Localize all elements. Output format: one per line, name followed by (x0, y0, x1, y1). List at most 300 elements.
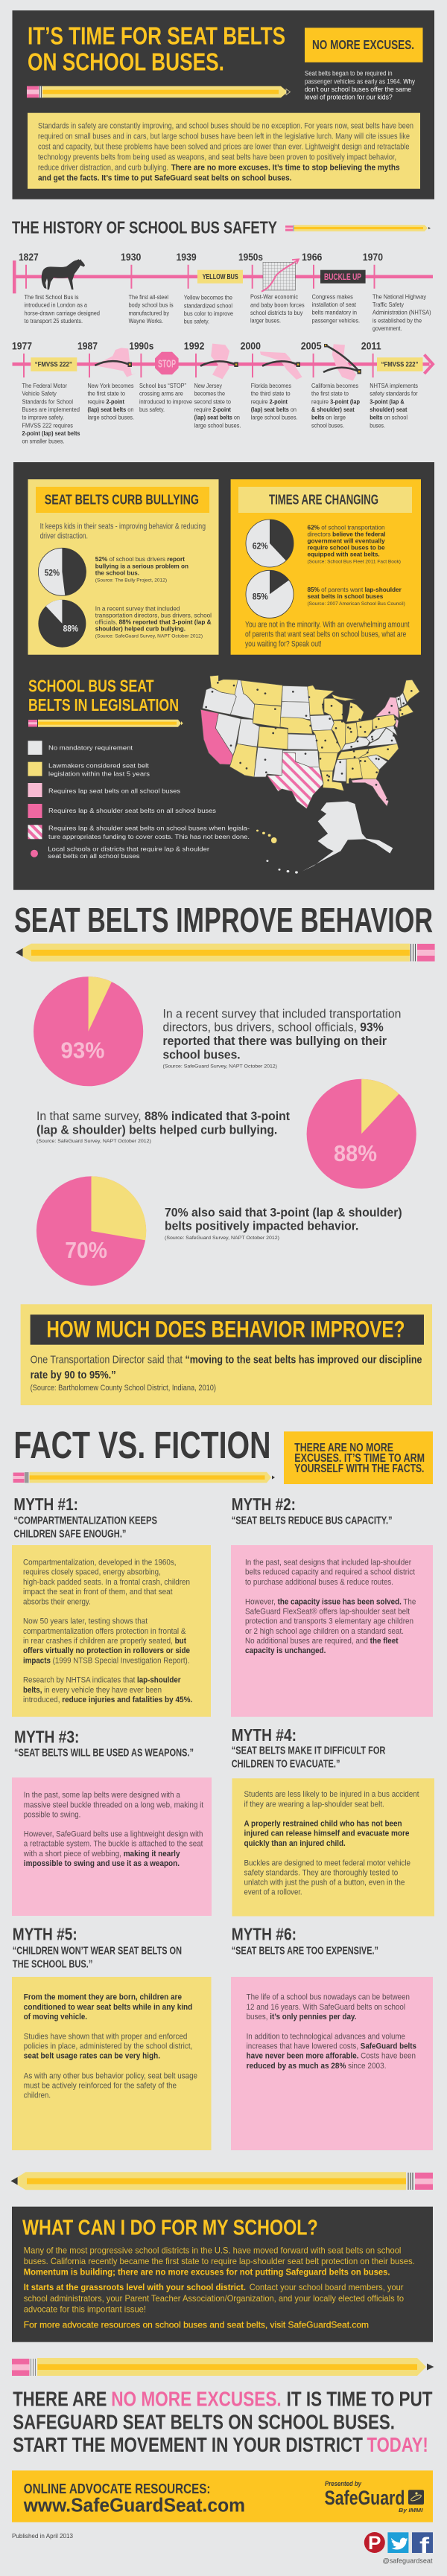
legend: map key: Requires lap seat belts on all school buses (48, 787, 180, 794)
legend: map key: No mandatory requirement (48, 744, 133, 752)
legend: map key: legislation within the last 5 years (48, 770, 150, 778)
myth 6 (231, 1925, 433, 2150)
timeline captions row 2: School bus “STOP” (139, 383, 186, 389)
timeline captions row 2: large school buses. (88, 415, 134, 421)
panel: myth 1 answer: compartmentalization offers protection in frontal & (23, 1627, 186, 1636)
legend: map key: Lawmakers considered seat belt (48, 762, 149, 770)
timeline captions row 1: Congress makes (312, 293, 353, 300)
panel: myth 3 answer: In the past, some lap belts were designed with a (24, 1791, 180, 1800)
text block: 62% stat: directors believe the federal (307, 531, 385, 538)
timeline captions row 2: belts on large (311, 415, 346, 421)
callout: arm yourself with the facts (284, 1431, 433, 1484)
text block: keeps kids in their seats (40, 522, 206, 540)
icon: pencil divider (28, 720, 183, 727)
timeline captions row 1: The National Highway (372, 293, 426, 300)
timeline years row 2: 2005 (301, 340, 322, 351)
text block: 52% stat: bullying is a serious problem on (95, 562, 188, 569)
timeline captions row 2: California becomes (311, 383, 358, 389)
panel: myth 4 answer: Buckles are designed to meet federal motor vehicle (244, 1859, 410, 1867)
panel: myth 3 answer (12, 1777, 212, 1916)
panel: myth 2 answer (231, 1545, 433, 1717)
text block: 85% stat (307, 586, 405, 607)
timeline captions row 1: Administration (NHTSA) (372, 310, 431, 316)
timeline captions row 2: safety standards for (370, 391, 418, 397)
pie chart: 93%: 93% (61, 1038, 104, 1064)
timeline captions row 2: bus safety. (139, 406, 165, 413)
panel: myth 1 answer: Now 50 years later, testing shows that (23, 1617, 148, 1626)
timeline captions row 2: (lap) seat belts on (194, 415, 240, 421)
timeline captions row 1: Traffic Safety (372, 301, 404, 308)
text block: seat belts began: don’t our school buses offer the same (305, 86, 411, 94)
timeline captions row 2: Vehicle Safety (22, 391, 57, 397)
panel: myth 3 answer: with a short piece of webbing, making it nearly (23, 1850, 180, 1859)
panel: myth 2 answer: protection and transports 3 elementary age children (245, 1617, 413, 1626)
text block: 70% stat (165, 1206, 402, 1241)
icon: New Jersey with belt (200, 344, 238, 379)
pie chart: 88% (307, 1079, 416, 1189)
closing statement (13, 2388, 432, 2456)
panel: myth 4 answer (232, 1778, 434, 1916)
panel: dark stats and legislation (13, 462, 434, 890)
heading: school bus seat belts in legislation: SCHOOL BUS SEAT (28, 677, 154, 696)
text block: 88% stat (37, 1110, 291, 1144)
timeline years row 2: 1990s (129, 340, 153, 351)
callout: no more excuses: NO MORE EXCUSES. (312, 37, 414, 52)
timeline captions row 2: 2-point (lap) seat belts (22, 430, 80, 437)
timeline captions row 2: crossing arms are (139, 391, 183, 397)
timeline captions row 1: bus safety. (184, 319, 209, 325)
panel: myth 2 answer: belts reduced capacity and required a school district (245, 1568, 415, 1577)
icon: stop sign: STOP (158, 357, 176, 371)
closing statement: NO MORE EXCUSES. (111, 2388, 282, 2411)
timeline years row 1: 1950s (238, 252, 263, 263)
panel: myth 6 answer: buses, it’s only pennies per day. (247, 2013, 356, 2022)
heading: school bus seat belts in legislation: BELTS IN LEGISLATION (28, 695, 179, 715)
heading: history: THE HISTORY OF SCHOOL BUS SAFETY (12, 217, 277, 237)
timeline captions row 2: The Federal Motor (22, 383, 67, 389)
timeline captions row 2: require 2-point (251, 398, 288, 405)
panel: myth 6 answer: In addition to technological advances and volume (247, 2032, 405, 2041)
panel: myth 1 answer: impact the seat in front of them, and that seat (23, 1588, 173, 1597)
pie chart: 70%: 70% (65, 1237, 107, 1263)
text block: 88% stat: (lap & shoulder) belts helped curb bullying. (37, 1123, 277, 1137)
timeline captions row 2: the third state to (251, 391, 291, 397)
icon: California with belts (323, 344, 361, 381)
panel: myth 5 answer: policies in place, administered by the school district, (24, 2042, 192, 2051)
timeline captions row 2: introduced to improve (139, 398, 193, 405)
panel: online advocate resources: www.SafeGuardSeat.com (23, 2493, 245, 2516)
pie chart: 88%: 88% (334, 1140, 377, 1166)
timeline years row 1: 1939 (176, 252, 197, 263)
timeline captions row 1: is established by the (372, 317, 422, 324)
panel: myth 2 answer: or 2 high school age children on a standard seat. (245, 1627, 404, 1636)
myth 1: “COMPARTMENTALIZATION KEEPS (13, 1515, 157, 1527)
timeline captions row 2: Florida becomes (251, 383, 291, 389)
timeline captions row 1: passenger vehicles. (312, 317, 360, 324)
legend: map key: Requires lap & shoulder seat belts on school buses when legisla- (48, 824, 250, 831)
panel: myth 1 answer: Research by NHTSA indicates that lap-shoulder (23, 1676, 181, 1685)
timeline captions row 2: large school buses. (251, 415, 298, 421)
logo: SafeGuard by IMMI: SafeGuard (325, 2487, 405, 2509)
text block: 52% stat (95, 555, 188, 583)
myth 5 (12, 1925, 212, 2150)
heading: what can I do: WHAT CAN I DO FOR MY SCHOOL? (22, 2216, 318, 2240)
callout: FMVSS 222: “FMVSS 222” (381, 360, 419, 369)
title: IT’S TIME FOR SEAT BELTS (28, 22, 285, 49)
panel: myth 5 answer: seat belt usage rates can be very high. (24, 2052, 160, 2061)
timeline captions row 1: Wayne Works. (129, 318, 163, 325)
icon: twitter (387, 2532, 408, 2553)
text block: 85% stat: seat belts in school buses (307, 592, 384, 600)
icon: facebook (412, 2532, 433, 2558)
heading: curb bullying: SEAT BELTS CURB BULLYING (45, 492, 199, 508)
myth 2: “SEAT BELTS REDUCE BUS CAPACITY.” (232, 1515, 393, 1527)
panel: online advocate resources: ONLINE ADVOCATE RESOURCES: (24, 2481, 210, 2496)
text block: 62% stat: government will eventually (307, 537, 385, 545)
callout: yellow bus: YELLOW BUS (203, 273, 238, 281)
timeline captions row 2: (lap) seat belts on (251, 406, 297, 413)
icon: pencil divider (27, 86, 291, 98)
timeline captions row 1: bus color to improve (184, 310, 234, 317)
panel: myth 5 answer: conditioned to wear seat belts while in any kind (24, 2003, 192, 2012)
panel: myth 1 answer (12, 1545, 211, 1717)
myth 2 (231, 1495, 433, 1717)
myth 6: MYTH #6: (232, 1925, 297, 1944)
panel: myth 1 answer: impacts (1999 NTSB Special Investigation Report). (23, 1656, 189, 1665)
panel: myth 2 answer: SafeGuard FlexSeat® offers lap-shoulder seat belt (245, 1607, 410, 1616)
myth 4: MYTH #4: (232, 1725, 297, 1745)
panel: myth 1 answer: requires closely spaced, energy absorbing, (23, 1568, 161, 1577)
panel: myth 4 answer: A properly restrained child who has not been (244, 1820, 402, 1829)
timeline captions row 1: The first all-steel (129, 294, 168, 301)
panel: myth 4 answer: safety standards. They are thoroughly tested to (244, 1868, 398, 1877)
panel: myth 2 answer: In the past, seat designs that included lap-shoulder (245, 1559, 411, 1567)
panel: times are changing (231, 479, 421, 655)
timeline captions row 1: Yellow becomes the (184, 295, 233, 301)
myth 4 (232, 1725, 434, 1916)
panel: myth 5 answer: From the moment they are born, children are (24, 1993, 182, 2002)
text block: advocacy: Momentum is building; there are no more excuses for not putting Safeguard belts on buses. (24, 2267, 390, 2278)
timeline captions row 2: New York becomes (88, 383, 134, 389)
timeline captions row 1: school districts to buy (250, 310, 302, 316)
panel: myth 1 answer: Compartmentalization, developed in the 1960s, (23, 1559, 176, 1567)
text block: keeps kids in their seats: It keeps kids in their seats - improving behavior & reducing (40, 522, 206, 531)
text block: intro paragraph: and get the facts. It’s time to put SafeGuard seat belts on school buses. (38, 173, 292, 182)
myth 3: “SEAT BELTS WILL BE USED AS WEAPONS.” (14, 1747, 194, 1759)
timeline captions row 1: belts mandatory in (312, 310, 357, 316)
timeline years row 1: 1970 (363, 252, 383, 263)
myth 1: CHILDREN SAFE ENOUGH.” (13, 1529, 127, 1541)
text block: quote (31, 1355, 422, 1393)
panel: myth 1 answer: absorbs their energy. (23, 1597, 91, 1606)
timeline captions row 1: and baby boom forces (250, 301, 305, 308)
panel: myth 1 answer: belts, in every vehicle they have ever been (23, 1686, 162, 1695)
panel: myth 3 answer: possible to swing. (24, 1810, 80, 1819)
myth 1 (12, 1495, 211, 1717)
text block: 85% stat: (Source: 2007 American School Bus Council) (307, 602, 405, 607)
callout: yellow bus (197, 270, 243, 284)
icon: facebook: f (419, 2534, 430, 2558)
timeline captions row 1: larger buses. (250, 318, 281, 325)
timeline captions row 2: Buses are implemented (22, 406, 80, 413)
panel: myth 1 answer: offers virtually no protection in rollovers or side (23, 1646, 190, 1655)
panel: myth 2 answer: to purchase additional buses & reduce routes. (245, 1578, 393, 1587)
text block: 93% stat: In a recent survey that included transportation (162, 1007, 401, 1020)
pie chart: 70% (37, 1176, 146, 1286)
text block: you are not in the minority: You are not in the minority. With an overwhelming amount (245, 621, 410, 630)
myth 4: “SEAT BELTS MAKE IT DIFFICULT FOR (232, 1745, 386, 1757)
pie chart: 62% (246, 520, 294, 567)
logo: SafeGuard by IMMI: Presented by (325, 2480, 362, 2487)
panel: myth 5 answer: As with any other bus behavior policy, seat belt usage (24, 2071, 197, 2080)
heading: school bus seat belts in legislation (28, 677, 179, 715)
timeline years row 1: 1966 (302, 252, 323, 263)
panel: how much does behavior improve (21, 1304, 432, 1405)
text block: seat belts began: level of protection for our kids? (305, 94, 393, 102)
logo: SafeGuard by IMMI: By IMMI (399, 2507, 424, 2513)
timeline captions row 1: The first School Bus is (24, 294, 79, 301)
panel: myth 6 answer: 12 and 16 years. With SafeGuard belts on school (247, 2003, 405, 2012)
panel: myth 6 answer: reduced by as much as 28% since 2003. (247, 2062, 386, 2071)
text block: 62% stat (307, 524, 401, 565)
closing statement: THERE ARE (13, 2388, 107, 2411)
timeline captions row 1: manufactured by (129, 310, 169, 316)
icon: pinterest (364, 2532, 385, 2554)
text block: 93% stat: directors, bus drivers, school officials, 93% (162, 1021, 384, 1035)
timeline captions row 1: standardized school (184, 302, 232, 309)
callout: FMVSS 222 (31, 357, 77, 371)
icon: pinterest: P (368, 2533, 381, 2554)
text block: keeps kids in their seats: driver distraction. (40, 531, 88, 540)
pie chart: 52% (38, 548, 86, 595)
text block: intro paragraph (28, 113, 420, 189)
timeline captions row 1: horse-drawn carriage designed (24, 310, 100, 316)
pie chart: 85% (246, 570, 294, 618)
panel: myth 1 answer: high-back padded seats. In a frontal crash, children (23, 1578, 190, 1587)
callout: arm yourself with the facts: THERE ARE NO MORE (294, 1442, 393, 1454)
panel: myth 6 answer: The life of a school bus nowadays can be between (247, 1993, 410, 2002)
title (28, 22, 285, 75)
panel: myth 6 answer (231, 1977, 433, 2150)
panel: myth 1 answer: introduced, reduce injuries and fatalities by 45%. (23, 1696, 192, 1704)
pie chart: 62%: 62% (253, 540, 268, 551)
panel: myth 2 answer: No additional buses are required, and the fleet (245, 1637, 399, 1646)
pie chart: 88% (38, 600, 86, 648)
text block: advocacy: school administrators, your Parent Teacher Association/Organization, and your locally elected officials to (24, 2293, 404, 2304)
text block: advocacy: It starts at the grassroots level with your school district. (24, 2282, 246, 2292)
timeline years row 2: 1987 (77, 340, 98, 351)
myth 6: “SEAT BELTS ARE TOO EXPENSIVE.” (232, 1945, 378, 1957)
timeline captions row 1: introduced in London as a (24, 302, 87, 309)
logo: SafeGuard by IMMI (325, 2480, 424, 2513)
text: social handle: @safeguardseat (383, 2557, 433, 2564)
timeline captions row 2: (lap) seat belts on (88, 406, 134, 413)
timeline years row 2: 1977 (12, 340, 32, 351)
timeline captions row 2: on smaller buses. (22, 438, 64, 445)
text: published date: Published in April 2013 (12, 2533, 74, 2540)
timeline captions row 2: require 2-point (194, 406, 231, 413)
callout: no more excuses (305, 28, 423, 63)
callout: FMVSS 222 (377, 357, 423, 371)
legend: map key: Requires lap & shoulder seat belts on all school buses (48, 807, 216, 814)
panel: myth 5 answer: Studies have shown that with proper and enforced (24, 2032, 187, 2041)
panel: myth 1 answer: in rear crashes if children are properly seated, but (23, 1637, 186, 1646)
timeline: 1827 to 1970 (13, 252, 433, 332)
myth 2: MYTH #2: (232, 1495, 296, 1514)
panel: myth 4 answer: event of a rollover. (244, 1888, 302, 1897)
map: Hawaii (256, 830, 277, 843)
text block: you are not in the minority (245, 621, 410, 649)
text block: quote: rate by 90 to 95%.” (31, 1370, 116, 1381)
text block: advocacy: buses. California recently became the first state to require lap-shoulder seat belt protection on their buses. (24, 2256, 415, 2266)
timeline captions row 2: FMVSS 222 requires (22, 422, 73, 429)
icon: pencil divider (10, 2172, 433, 2190)
timeline captions row 1: installation of seat (312, 301, 357, 308)
heading: times are changing: TIMES ARE CHANGING (269, 492, 378, 508)
text block: 93% stat: school buses. (162, 1048, 241, 1061)
panel: online advocate resources (12, 2470, 433, 2522)
timeline years row 1 (19, 252, 383, 263)
panel: myth 3 answer: However, SafeGuard belts use a lightweight design with (24, 1830, 203, 1839)
icon: pencil divider (12, 2358, 434, 2376)
panel: intro header (12, 10, 434, 199)
panel: seat belts curb bullying (28, 479, 219, 655)
text block: intro paragraph: There are no more excuses. It’s time to stop believing the myths (171, 163, 400, 172)
icon: Florida with belt (260, 351, 302, 380)
timeline captions row 2: New Jersey (194, 383, 222, 389)
myth 4: CHILDREN TO EVACUATE.” (232, 1759, 340, 1771)
text block: 70% stat: (Source: SafeGuard Survey, NAPT October 2012) (165, 1236, 279, 1241)
timeline years row 2: 2011 (361, 340, 381, 351)
text block: 88% stat: transportation directors, bus drivers, school (95, 611, 212, 619)
panel: myth 5 answer (12, 1977, 212, 2150)
timeline years row 1: 1827 (19, 252, 39, 263)
text block: seat belts began: Seat belts began to be required in (305, 70, 393, 78)
closing statement: START THE MOVEMENT IN YOUR DISTRICT (13, 2433, 363, 2456)
text block: 88% stat: officials, 88% reported that 3-point (lap & (95, 618, 212, 625)
text block: advocacy (24, 2245, 415, 2330)
text block: seat belts began: passenger vehicles as early as 1964. Why (305, 77, 415, 86)
timeline captions row 2: & shoulder) seat (311, 406, 355, 413)
timeline captions row 1: government. (372, 325, 402, 332)
panel: myth 4 answer: quickly than an injured child. (244, 1839, 346, 1848)
text block: intro paragraph: reduce driver distraction, and curb bullying. (38, 163, 168, 172)
text block: 88% stat: shoulder) helped curb bullying. (95, 624, 186, 632)
timeline years row 2: 2000 (241, 340, 261, 351)
legend: map key: ture appropriates funding to cover costs. This has not been done. (48, 833, 250, 840)
text block: 70% stat: belts positively impacted behavior. (165, 1220, 358, 1233)
text block: 52% stat: the school bus. (95, 569, 139, 576)
timeline captions row 2: large school buses. (194, 422, 241, 429)
icon: horse (42, 259, 85, 290)
icon: stop sign (155, 352, 179, 374)
timeline: 1977 to 2011 (12, 340, 433, 445)
panel: myth 3 answer: impossible to swing and use it as a weapon. (24, 1859, 180, 1868)
text block: 62% stat: (Source: School Bus Fleet 2011 Fact Book) (307, 560, 401, 565)
text block: advocacy: advocate for this important issue! (24, 2304, 146, 2315)
panel: myth 5 answer: must be actively reinforced for the safety of the (24, 2081, 177, 2090)
text block: 62% stat: 62% of school transportation (307, 524, 385, 531)
text block: seat belts began (305, 70, 415, 102)
callout: buckle up: BUCKLE UP (324, 272, 361, 282)
icon: New York with belt (95, 348, 136, 377)
timeline years row 2: 1992 (184, 340, 205, 351)
timeline captions row 2: buses. (370, 422, 385, 429)
text block: quote: (Source: Bartholomew County School District, Indiana, 2010) (31, 1384, 216, 1393)
icon: pencil divider (16, 944, 435, 962)
panel: myth 4 answer: injured can release himself and evacuate more (244, 1829, 410, 1838)
panel: myth 4 answer: unlatch with just the push of a button, even in the (244, 1879, 405, 1888)
timeline years row 2 (12, 340, 381, 351)
text block: 93% stat: (Source: SafeGuard Survey, NAPT October 2012) (162, 1064, 277, 1069)
panel: myth 6 answer: have never been more afforable. Costs have been (247, 2052, 416, 2061)
text block: you are not in the minority: you waiting for? Speak out! (245, 640, 322, 649)
timeline captions row 2: shoulder) seat (370, 406, 408, 413)
text block: 88% stat: In that same survey, 88% indicated that 3-point (37, 1110, 291, 1123)
text block: 88% stat (95, 604, 212, 639)
callout: buckle up (320, 270, 366, 284)
timeline captions row 2: school buses. (311, 422, 344, 429)
pie chart: 88%: 88% (63, 624, 78, 634)
timeline captions row 2: Standards for School (22, 398, 73, 405)
timeline years row 1: 1930 (121, 252, 141, 263)
panel: myth 3 answer: a retractable system. The buckle is attached to the seat (24, 1840, 203, 1849)
heading: fact vs fiction: FACT VS. FICTION (13, 1424, 271, 1466)
heading: times are changing (238, 487, 412, 513)
timeline captions row 2 (22, 383, 418, 445)
myth 5: THE SCHOOL BUS.” (13, 1958, 92, 1970)
map: Alaska (266, 802, 393, 874)
panel: myth 6 answer: increases that have lowered costs, SafeGuard belts (247, 2042, 416, 2051)
panel: myth 2 answer: capacity is unchanged. (245, 1646, 326, 1655)
timeline captions row 1: body school bus is (129, 302, 174, 309)
panel: myth 5 answer: children. (24, 2091, 51, 2100)
legend: map key: Local schools or districts that require lap & shoulder (48, 845, 209, 852)
text block: 85% stat: 85% of parents want lap-shoulder (307, 586, 402, 593)
text block: advocacy: For more advocate resources on school buses and seat belts, visit SafeGuardSeat.com (24, 2319, 369, 2330)
panel: what can I do for my school (12, 2207, 433, 2342)
text block: advocacy: Contact your school board members, your (250, 2282, 404, 2292)
panel: myth 5 answer: of moving vehicle. (24, 2013, 87, 2022)
text block: 88% stat: In a recent survey that included (95, 604, 180, 612)
text block: 88% stat: (Source: SafeGuard Survey, NAPT October 2012) (37, 1139, 151, 1144)
text block: 93% stat (162, 1007, 401, 1069)
timeline captions row 2: the first state to (88, 391, 125, 397)
panel: myth 3 answer: massive steel buckle threaded on a long web, making it (24, 1800, 203, 1809)
timeline captions row 2: require 3-point (lap (311, 398, 360, 405)
legend: map key: seat belts on all school buses (48, 852, 140, 860)
myth 3: MYTH #3: (14, 1728, 79, 1747)
text block: 52% stat: (Source: The Bully Project, 2012) (95, 578, 167, 583)
callout: FMVSS 222: “FMVSS 222” (35, 360, 72, 369)
text block: 62% stat: require school buses to be (307, 544, 385, 552)
timeline captions row 2: to improve safety. (22, 415, 64, 421)
myth 5: “CHILDREN WON’T WEAR SEAT BELTS ON (13, 1945, 182, 1957)
myth 1: MYTH #1: (13, 1495, 78, 1514)
text block: 62% stat: equipped with seat belts. (307, 551, 380, 558)
timeline captions row 2: NHTSA implements (370, 383, 418, 389)
timeline captions row 1: Post-War economic (250, 294, 298, 301)
closing statement: TODAY! (367, 2433, 428, 2456)
text block: 88% stat: (Source: SafeGuard Survey, NAPT October 2012) (95, 635, 203, 639)
myth 3 (12, 1728, 212, 1916)
text block: 93% stat: reported that there was bullying on their (162, 1035, 387, 1048)
panel: myth 2 answer: However, the capacity issue has been solved. The (245, 1597, 416, 1606)
myth 5: MYTH #5: (13, 1925, 77, 1944)
legend: map key (28, 741, 250, 860)
pie chart: 85%: 85% (253, 591, 268, 601)
timeline captions row 2: belts on school (370, 415, 408, 421)
